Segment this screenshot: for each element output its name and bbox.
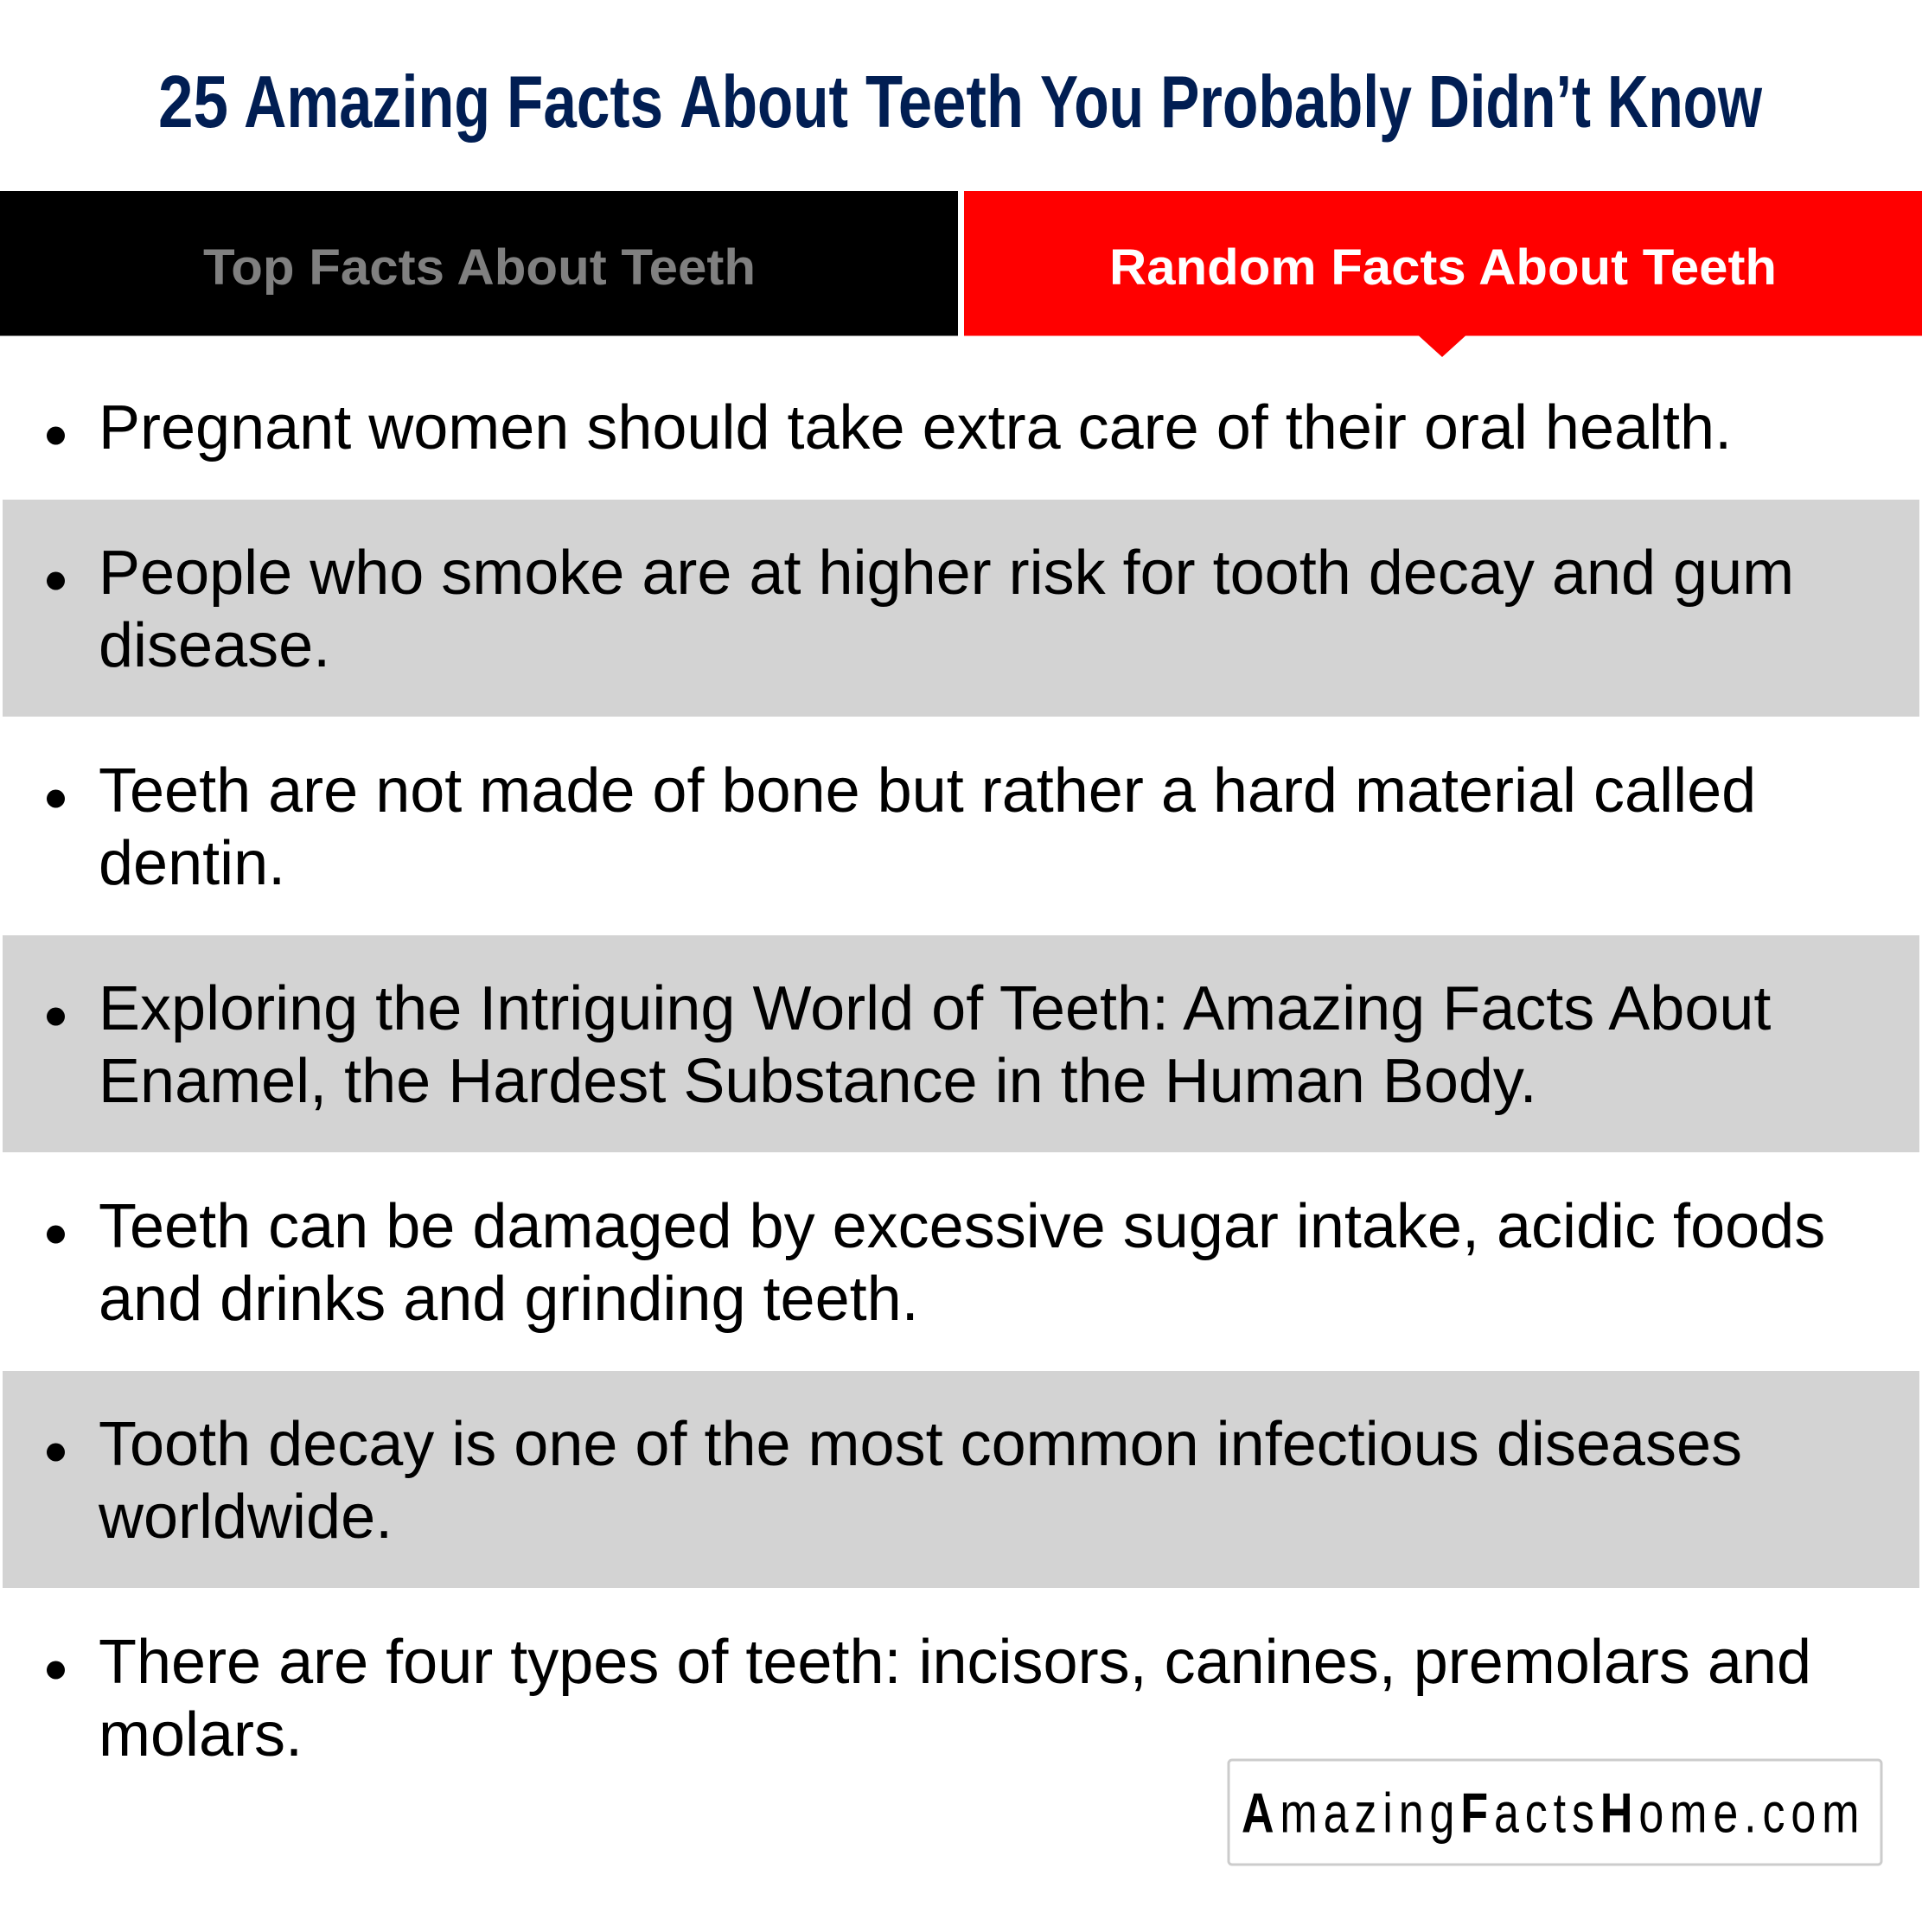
- tab: top facts: [0, 191, 958, 335]
- fact row 4: Enamel, the Hardest Substance in the Human Body.: [99, 1047, 1537, 1116]
- tab: random facts: Random Facts About Teeth: [1109, 239, 1777, 296]
- title: Probably: [1160, 61, 1412, 143]
- fact row 3: Teeth are not made of bone but rather a hard material called: [99, 756, 1756, 826]
- watermark badge: AmazingFactsHome.com: [1242, 1782, 1865, 1845]
- fact row 2: disease.: [99, 611, 330, 680]
- fact row 2: [3, 500, 1919, 717]
- fact row 6: Tooth decay is one of the most common infectious diseases: [99, 1410, 1742, 1479]
- title: Facts: [507, 61, 663, 143]
- title: Know: [1607, 61, 1762, 143]
- fact row 4: Exploring the Intriguing World of Teeth: Amazing Facts About: [99, 974, 1771, 1043]
- fact row 6: [3, 1371, 1919, 1588]
- fact row 6: worldwide.: [98, 1482, 393, 1552]
- title: Didn’t: [1428, 61, 1591, 143]
- title: Teeth: [865, 61, 1024, 143]
- fact row 1: Pregnant women should take extra care of their oral health.: [99, 393, 1732, 462]
- title: About: [680, 61, 848, 143]
- fact row 7: There are four types of teeth: incisors, canines, premolars and: [99, 1628, 1811, 1697]
- fact row 5: [47, 1192, 1825, 1334]
- fact row 7: molars.: [99, 1700, 303, 1769]
- tab: top facts: Top Facts About Teeth: [203, 239, 756, 296]
- fact row 5: Teeth can be damaged by excessive sugar intake, acidic foods: [99, 1192, 1825, 1261]
- watermark badge: [1229, 1760, 1881, 1865]
- fact row 3: dentin.: [99, 829, 285, 898]
- title: 25: [158, 61, 228, 143]
- title: Amazing: [244, 61, 490, 143]
- fact row 7: [47, 1628, 1811, 1769]
- fact row 5: and drinks and grinding teeth.: [99, 1265, 919, 1334]
- title: You: [1040, 61, 1144, 143]
- fact row 3: [47, 756, 1756, 898]
- fact row 4: [3, 935, 1919, 1152]
- tab: random facts: [964, 191, 1922, 357]
- fact row 2: People who smoke are at higher risk for tooth decay and gum: [99, 539, 1794, 608]
- title: [158, 61, 1762, 143]
